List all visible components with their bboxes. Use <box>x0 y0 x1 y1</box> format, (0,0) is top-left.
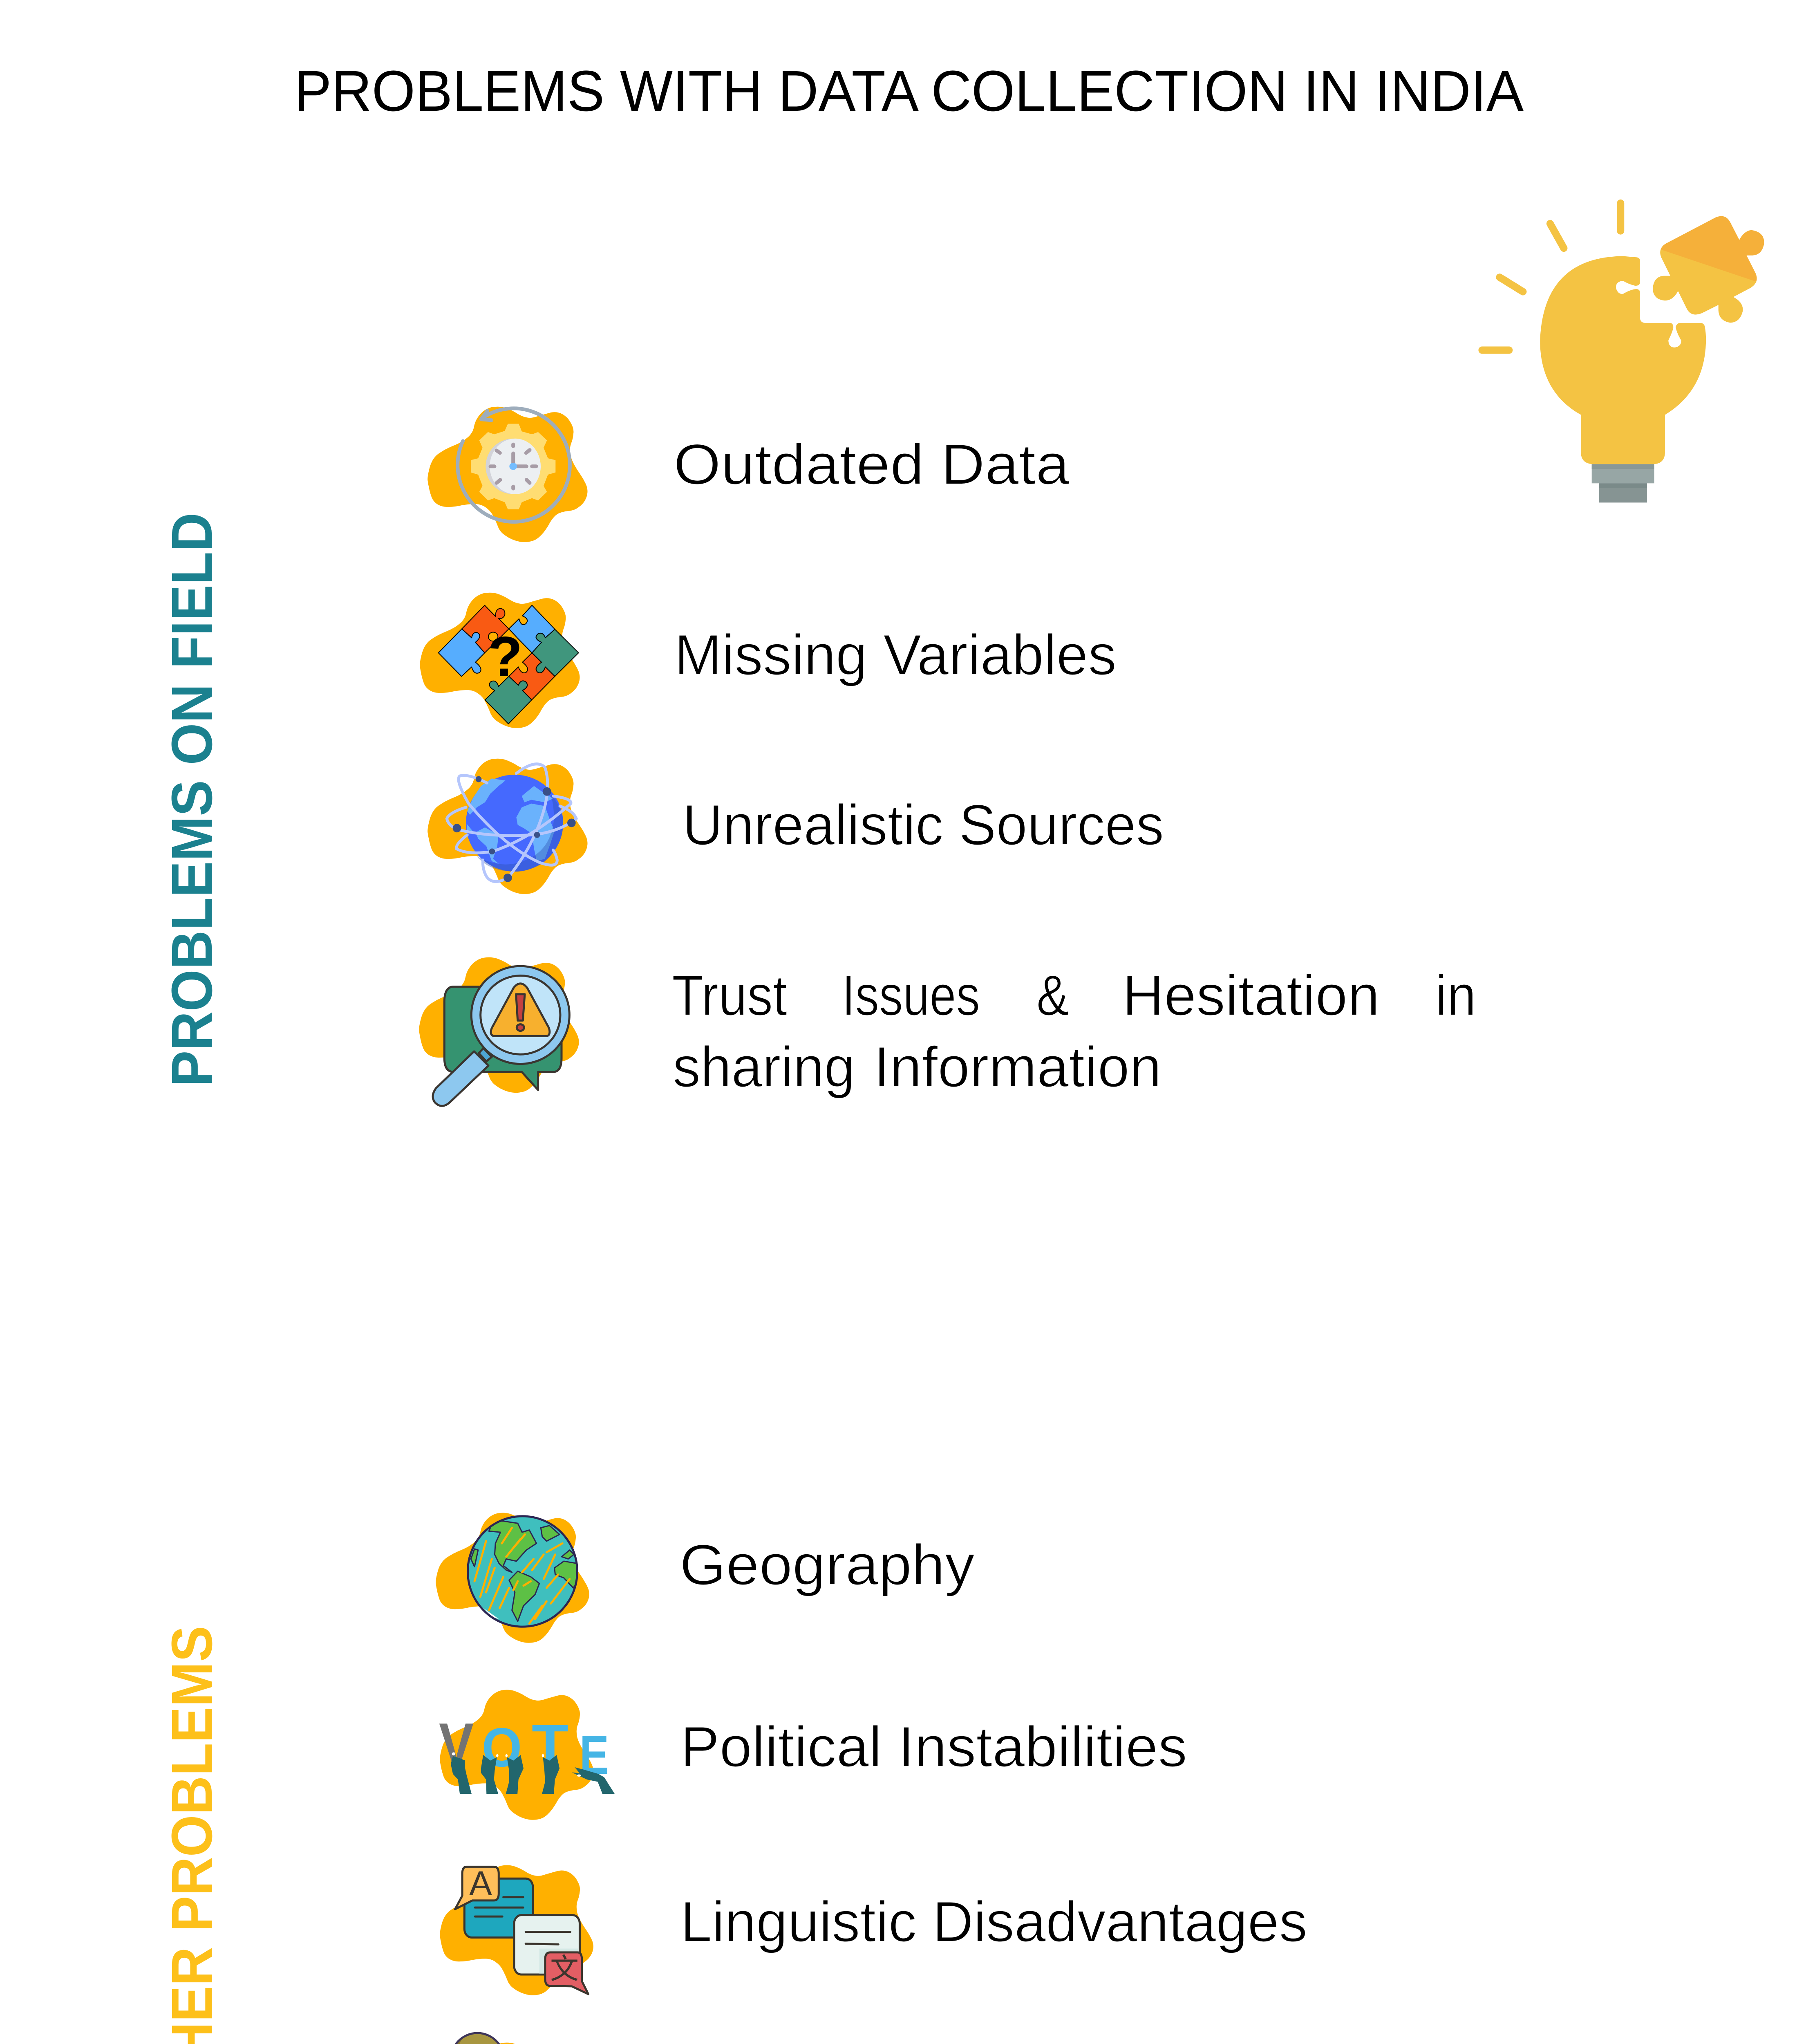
label: unrealistic sources: Unrealistic Sources <box>683 793 1164 857</box>
icon: puzzle with question mark <box>420 593 580 728</box>
letter V: V <box>439 1711 474 1777</box>
blob background <box>440 1690 593 1820</box>
label: linguistic disadvantages: Linguistic Disadvantages <box>680 1889 1307 1954</box>
speech bubbles <box>455 1867 589 1994</box>
heading: problems on field: PROBLEMS ON FIELD <box>159 513 224 1087</box>
puzzle piece <box>1653 216 1764 323</box>
letter O: O <box>482 1717 522 1778</box>
bulb body <box>1540 256 1706 464</box>
label: trust issues and hesitation in sharing information: Issues <box>842 963 980 1027</box>
label: trust issues and hesitation in sharing information <box>672 963 1476 1099</box>
clock artwork <box>458 408 570 522</box>
icon: hands holding VOTE letters <box>439 1690 615 1820</box>
magnifier artwork <box>433 966 569 1106</box>
network artwork <box>454 2032 500 2044</box>
label: missing variables: Missing Variables <box>674 623 1117 687</box>
bulb glow rays <box>1482 203 1620 350</box>
question mark: ? <box>488 625 522 688</box>
icon: clock in gear with arrow <box>427 407 588 542</box>
row: linguistic disadvantages <box>440 1864 1307 1995</box>
blob background <box>420 593 580 728</box>
label: trust issues and hesitation in sharing information: Trust <box>672 963 787 1027</box>
blob background <box>440 1865 593 1995</box>
row: political instabilities <box>439 1690 1187 1820</box>
puzzle pieces <box>439 605 579 724</box>
row: geography <box>436 1513 975 1643</box>
row: missing variables <box>420 593 1117 728</box>
icon: lightbulb with yellow puzzle piece <box>1482 203 1764 502</box>
icon: magnifier over warning <box>419 957 579 1106</box>
icon: translation speech bubbles <box>440 1864 593 1995</box>
letter T: T <box>532 1712 568 1777</box>
glyph: A: A <box>469 1864 492 1903</box>
label: outdated data: Outdated Data <box>674 432 1070 496</box>
label: geography: Geography <box>680 1533 975 1597</box>
blob background <box>436 1513 589 1643</box>
label: trust issues and hesitation in sharing information: sharing <box>673 1035 855 1099</box>
label: trust issues and hesitation in sharing information: Hesitation <box>1122 963 1380 1027</box>
icon: globe with orbits <box>427 759 588 894</box>
row: outdated data <box>427 407 1070 542</box>
glyph: wen: 文 <box>550 1946 579 1987</box>
hands <box>451 1753 615 1794</box>
bulb screw base <box>1592 464 1654 502</box>
globe artwork <box>447 764 576 882</box>
label: political instabilities: Political Instabilities <box>680 1715 1187 1779</box>
row: connectivity <box>454 2032 515 2044</box>
blob background <box>427 407 588 542</box>
row: trust issues <box>419 957 1476 1106</box>
label: trust issues and hesitation in sharing information: in <box>1435 963 1476 1027</box>
blob background <box>419 957 579 1093</box>
title: PROBLEMS WITH DATA COLLECTION IN INDIA <box>294 58 1524 123</box>
globe artwork <box>468 1516 578 1627</box>
letter E: E <box>580 1724 609 1786</box>
blob background <box>440 2043 593 2044</box>
label: trust issues and hesitation in sharing information: & <box>1036 963 1069 1027</box>
label: trust issues and hesitation in sharing information: Information <box>874 1035 1161 1099</box>
blob background <box>427 759 588 894</box>
icon: connected people network <box>454 2032 515 2044</box>
icon: hand-drawn globe <box>436 1513 589 1643</box>
row: unrealistic sources <box>427 759 1164 894</box>
